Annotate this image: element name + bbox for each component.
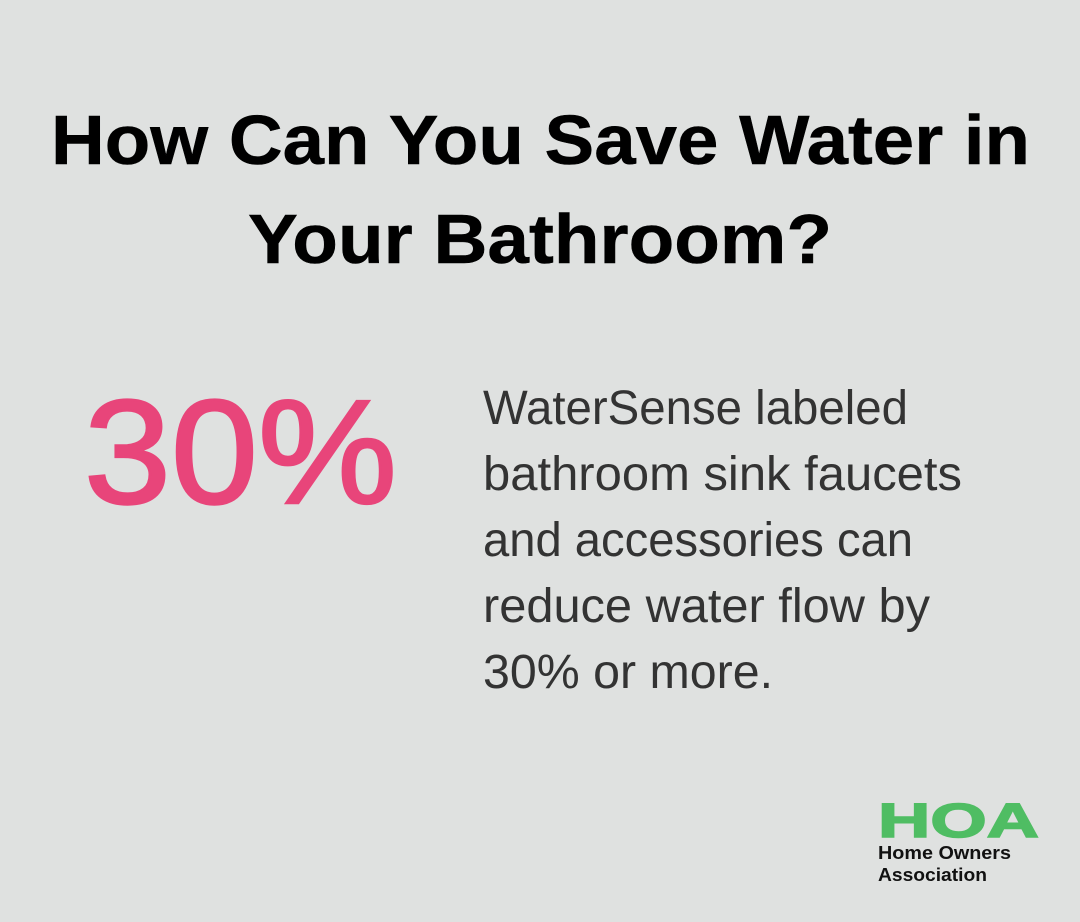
title <box>51 101 1030 278</box>
description text: and accessories can <box>483 514 913 567</box>
title: Your Bathroom? <box>248 200 832 278</box>
logo: HOA Home Owners Association: Home Owners <box>878 843 1011 863</box>
logo: HOA Home Owners Association <box>878 795 1039 885</box>
logo: HOA Home Owners Association: Association <box>878 865 987 885</box>
logo: HOA Home Owners Association: HOA <box>878 795 1039 848</box>
description text: WaterSense labeled <box>483 382 908 435</box>
statistic: 30%: 30% <box>84 370 397 535</box>
description text: bathroom sink faucets <box>483 448 962 501</box>
description text <box>483 382 962 699</box>
description text: 30% or more. <box>483 646 773 699</box>
description text: reduce water flow by <box>483 580 930 633</box>
title: How Can You Save Water in <box>51 101 1030 179</box>
